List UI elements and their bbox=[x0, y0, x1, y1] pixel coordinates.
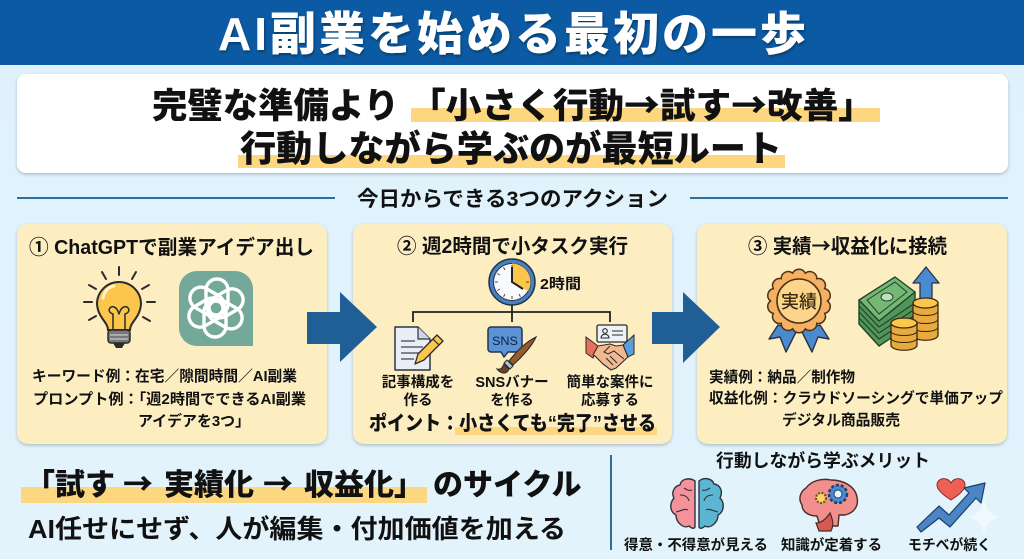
panel: key message bbox=[17, 74, 1008, 173]
icon: document and pencil bbox=[395, 327, 443, 370]
action 3 details: 収益化例：クラウドソーシングで単価アップ bbox=[709, 389, 1003, 407]
task labels: 応募する bbox=[581, 392, 639, 409]
action 3 details: 実績例：納品／制作物 bbox=[709, 368, 855, 386]
task labels: 簡単な案件に bbox=[566, 373, 654, 391]
icon: achievement badge bbox=[768, 269, 830, 352]
highlight line 2 bbox=[238, 155, 785, 168]
connector tree bbox=[413, 305, 610, 322]
icon: two-tone brain bbox=[671, 479, 723, 528]
icon: money, coins and up arrow bbox=[859, 267, 939, 350]
panel: action 3 bbox=[697, 224, 1007, 444]
cycle heading: 「試す bbox=[25, 469, 115, 502]
point highlight bbox=[455, 427, 657, 435]
merit labels: 得意・不得意が見える bbox=[624, 536, 768, 554]
cycle heading: → bbox=[263, 460, 293, 504]
icon: heart and rising arrow bbox=[917, 479, 985, 532]
action 1 details: キーワード例：在宅／隙間時間／AI副業 bbox=[32, 367, 297, 385]
task labels: 作る bbox=[404, 392, 432, 409]
task labels: 記事構成を bbox=[382, 373, 454, 391]
action 1 details bbox=[32, 367, 306, 430]
task labels: SNSバナー bbox=[475, 375, 549, 391]
cycle subheading: AI任せにせず、人が編集・付加価値を加える bbox=[28, 514, 566, 544]
panel: action 2 bbox=[353, 224, 672, 444]
cycle heading bbox=[21, 460, 582, 504]
task labels: を作る bbox=[490, 392, 534, 409]
merit labels bbox=[624, 536, 991, 554]
icon: light bulb bbox=[84, 267, 155, 348]
message line 1 right: 「小さく行動→試す→改善」 bbox=[410, 78, 874, 129]
message line 2: 行動しながら学ぶのが最短ルート bbox=[240, 128, 782, 169]
highlight line 1 bbox=[411, 108, 880, 122]
icon: brain with gears bbox=[800, 479, 857, 531]
arrow: action 1 to action 2 bbox=[307, 292, 377, 362]
action 3 details: デジタル商品販売 bbox=[782, 411, 900, 429]
cycle heading: 収益化」 bbox=[304, 469, 424, 502]
icon: SNS bubble and brush bbox=[488, 327, 536, 373]
action 1 details: アイデアを3つ」 bbox=[138, 412, 250, 430]
action 2 heading: ② 週2時間で小タスク実行 bbox=[397, 235, 628, 258]
clock label: 2時間 bbox=[540, 276, 581, 293]
task labels bbox=[382, 373, 654, 409]
cycle heading: 実績化 bbox=[164, 469, 254, 502]
message line 1 left: 完璧な準備より bbox=[152, 87, 399, 126]
cycle heading: → bbox=[123, 460, 153, 504]
icon: handshake and profile card bbox=[586, 325, 634, 370]
action 1 details: プロンプト例：「週2時間でできるAI副業 bbox=[33, 390, 306, 408]
panel: learning merits bbox=[624, 450, 1001, 554]
icon: clock bbox=[489, 259, 535, 305]
sparkle watermark bbox=[967, 498, 1001, 536]
cycle heading: のサイクル bbox=[433, 469, 582, 502]
point text: ポイント：小さくても“完了”させる bbox=[369, 412, 656, 435]
title: AI副業を始める最初の一歩 bbox=[218, 8, 806, 60]
header banner bbox=[0, 0, 1024, 65]
icon: achievement badge: 実績 bbox=[781, 292, 817, 312]
section heading: three actions: 今日からできる3つのアクション bbox=[357, 188, 668, 211]
icon: SNS bubble and brush: SNS bbox=[492, 334, 518, 348]
icon: ChatGPT logo bbox=[179, 271, 253, 346]
merit labels: 知識が定着する bbox=[781, 536, 882, 554]
merit labels: モチベが続く bbox=[908, 536, 991, 554]
action 3 details bbox=[709, 368, 1003, 429]
panel: action 1 bbox=[17, 224, 327, 444]
arrow: action 2 to action 3 bbox=[652, 292, 720, 363]
merits heading: 行動しながら学ぶメリット bbox=[716, 450, 930, 471]
action 3 heading: ③ 実績→収益化に接続 bbox=[748, 230, 947, 259]
action 1 heading: ① ChatGPTで副業アイデア出し bbox=[29, 235, 314, 259]
